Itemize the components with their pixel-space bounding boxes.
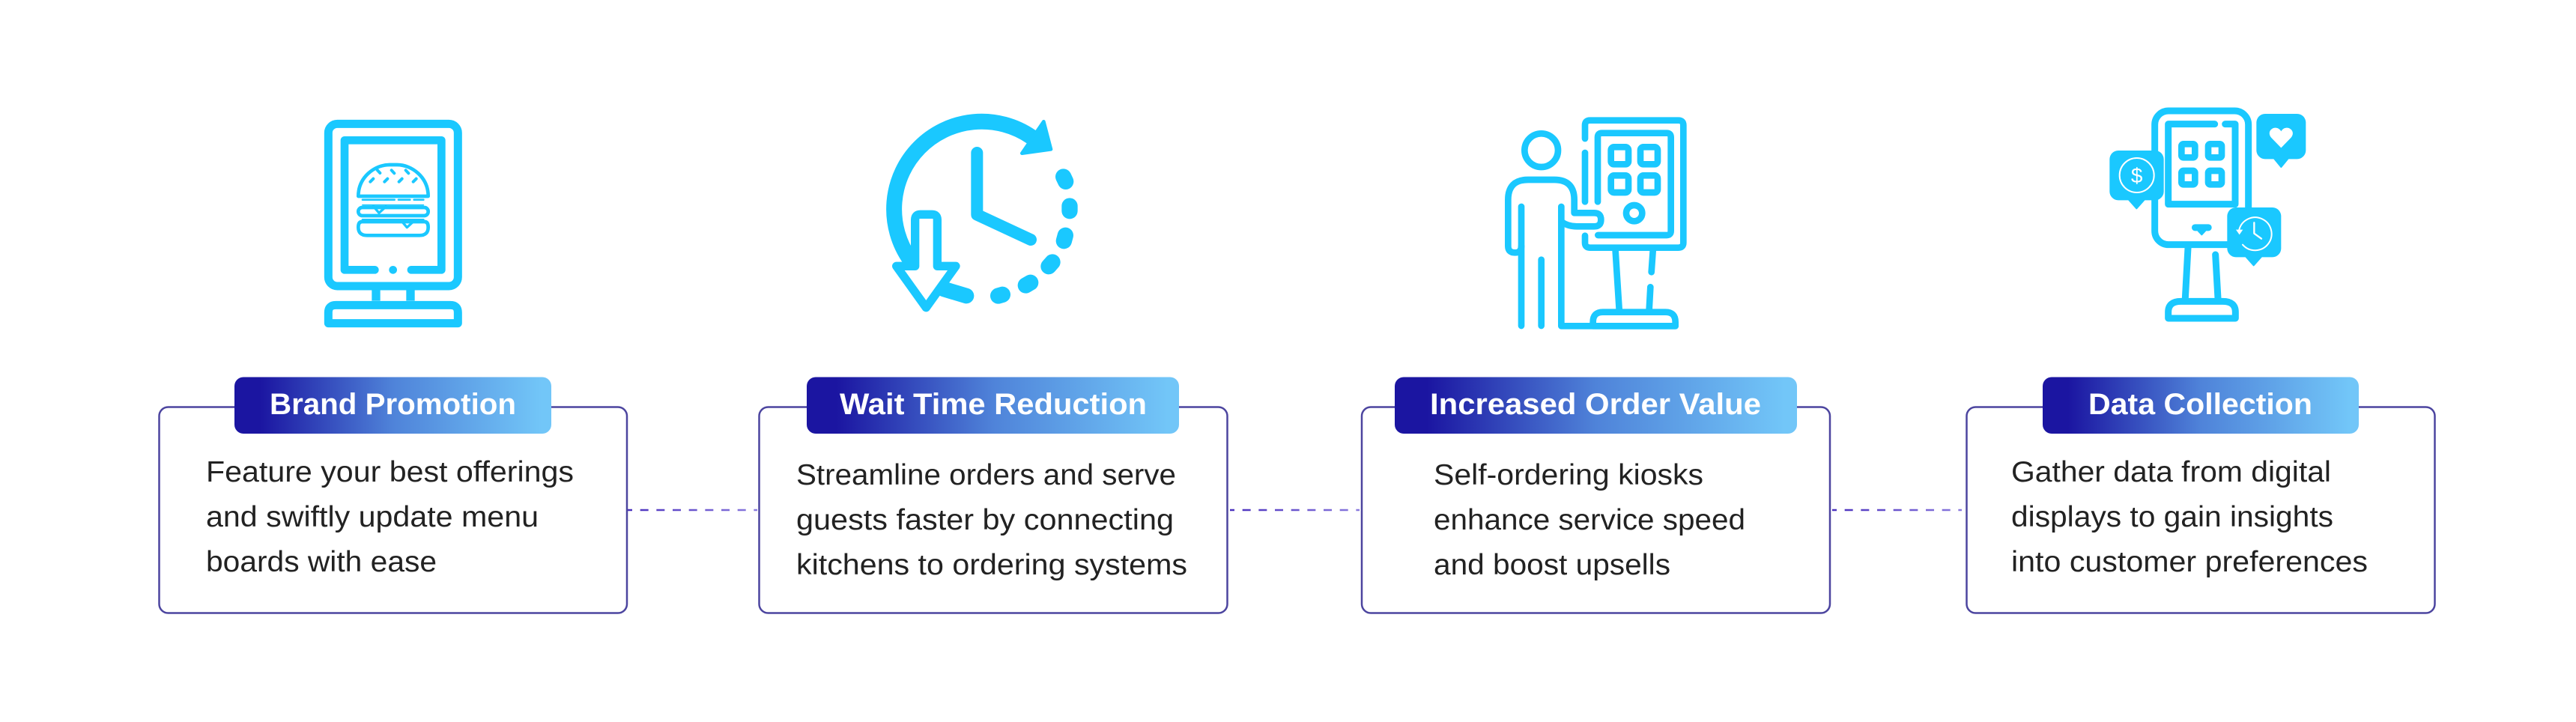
connector: card 2 to card 3 — [1230, 509, 1360, 511]
connector: card 3 to card 4 — [1832, 509, 1962, 511]
panel: Wait Time Reduction — [760, 121, 1227, 613]
body text: and swiftly update menu — [206, 501, 539, 533]
icon: person at self-ordering kiosk — [1508, 121, 1683, 326]
heading badge: Wait Time Reduction — [840, 388, 1147, 421]
body text: kitchens to ordering systems — [796, 549, 1187, 581]
heading badge: Increased Order Value — [1430, 388, 1761, 421]
panel: Brand Promotion — [159, 124, 627, 613]
icon: kiosk with data bubbles — [2109, 111, 2306, 318]
panel: Data Collection — [1967, 111, 2434, 613]
heading badge — [2043, 377, 2359, 434]
card outline — [1967, 407, 2434, 613]
card outline — [159, 407, 627, 613]
body text — [206, 456, 574, 578]
card outline — [760, 407, 1227, 613]
body text: Feature your best offerings — [206, 456, 574, 488]
heading badge — [807, 377, 1179, 434]
body text: boards with ease — [206, 546, 437, 578]
body text: guests faster by connecting — [796, 504, 1174, 536]
body text — [1434, 459, 1745, 581]
body text: Streamline orders and serve — [796, 459, 1176, 491]
body text: Self-ordering kiosks — [1434, 459, 1703, 491]
heading badge — [1395, 377, 1797, 434]
body text: enhance service speed — [1434, 504, 1745, 536]
card outline — [1362, 407, 1830, 613]
body text: displays to gain insights — [2011, 501, 2333, 533]
body text: into customer preferences — [2011, 546, 2368, 578]
connector: card 1 to card 2 — [628, 509, 757, 511]
bubble: dollar — [2109, 151, 2164, 208]
bubble: clock history — [2227, 207, 2281, 265]
body text — [796, 459, 1187, 581]
icon: menu board with burger — [328, 124, 458, 324]
bubble: heart — [2256, 114, 2306, 167]
body text: Gather data from digital — [2011, 456, 2331, 488]
panel: Increased Order Value — [1362, 121, 1830, 613]
heading badge — [234, 377, 551, 434]
icon: clock with down arrow — [894, 121, 1070, 308]
body text — [2011, 456, 2368, 578]
heading badge: Brand Promotion — [270, 388, 516, 421]
heading badge: Data Collection — [2088, 388, 2312, 421]
bubble: dollar: $ — [2131, 164, 2143, 187]
body text: and boost upsells — [1434, 549, 1670, 581]
